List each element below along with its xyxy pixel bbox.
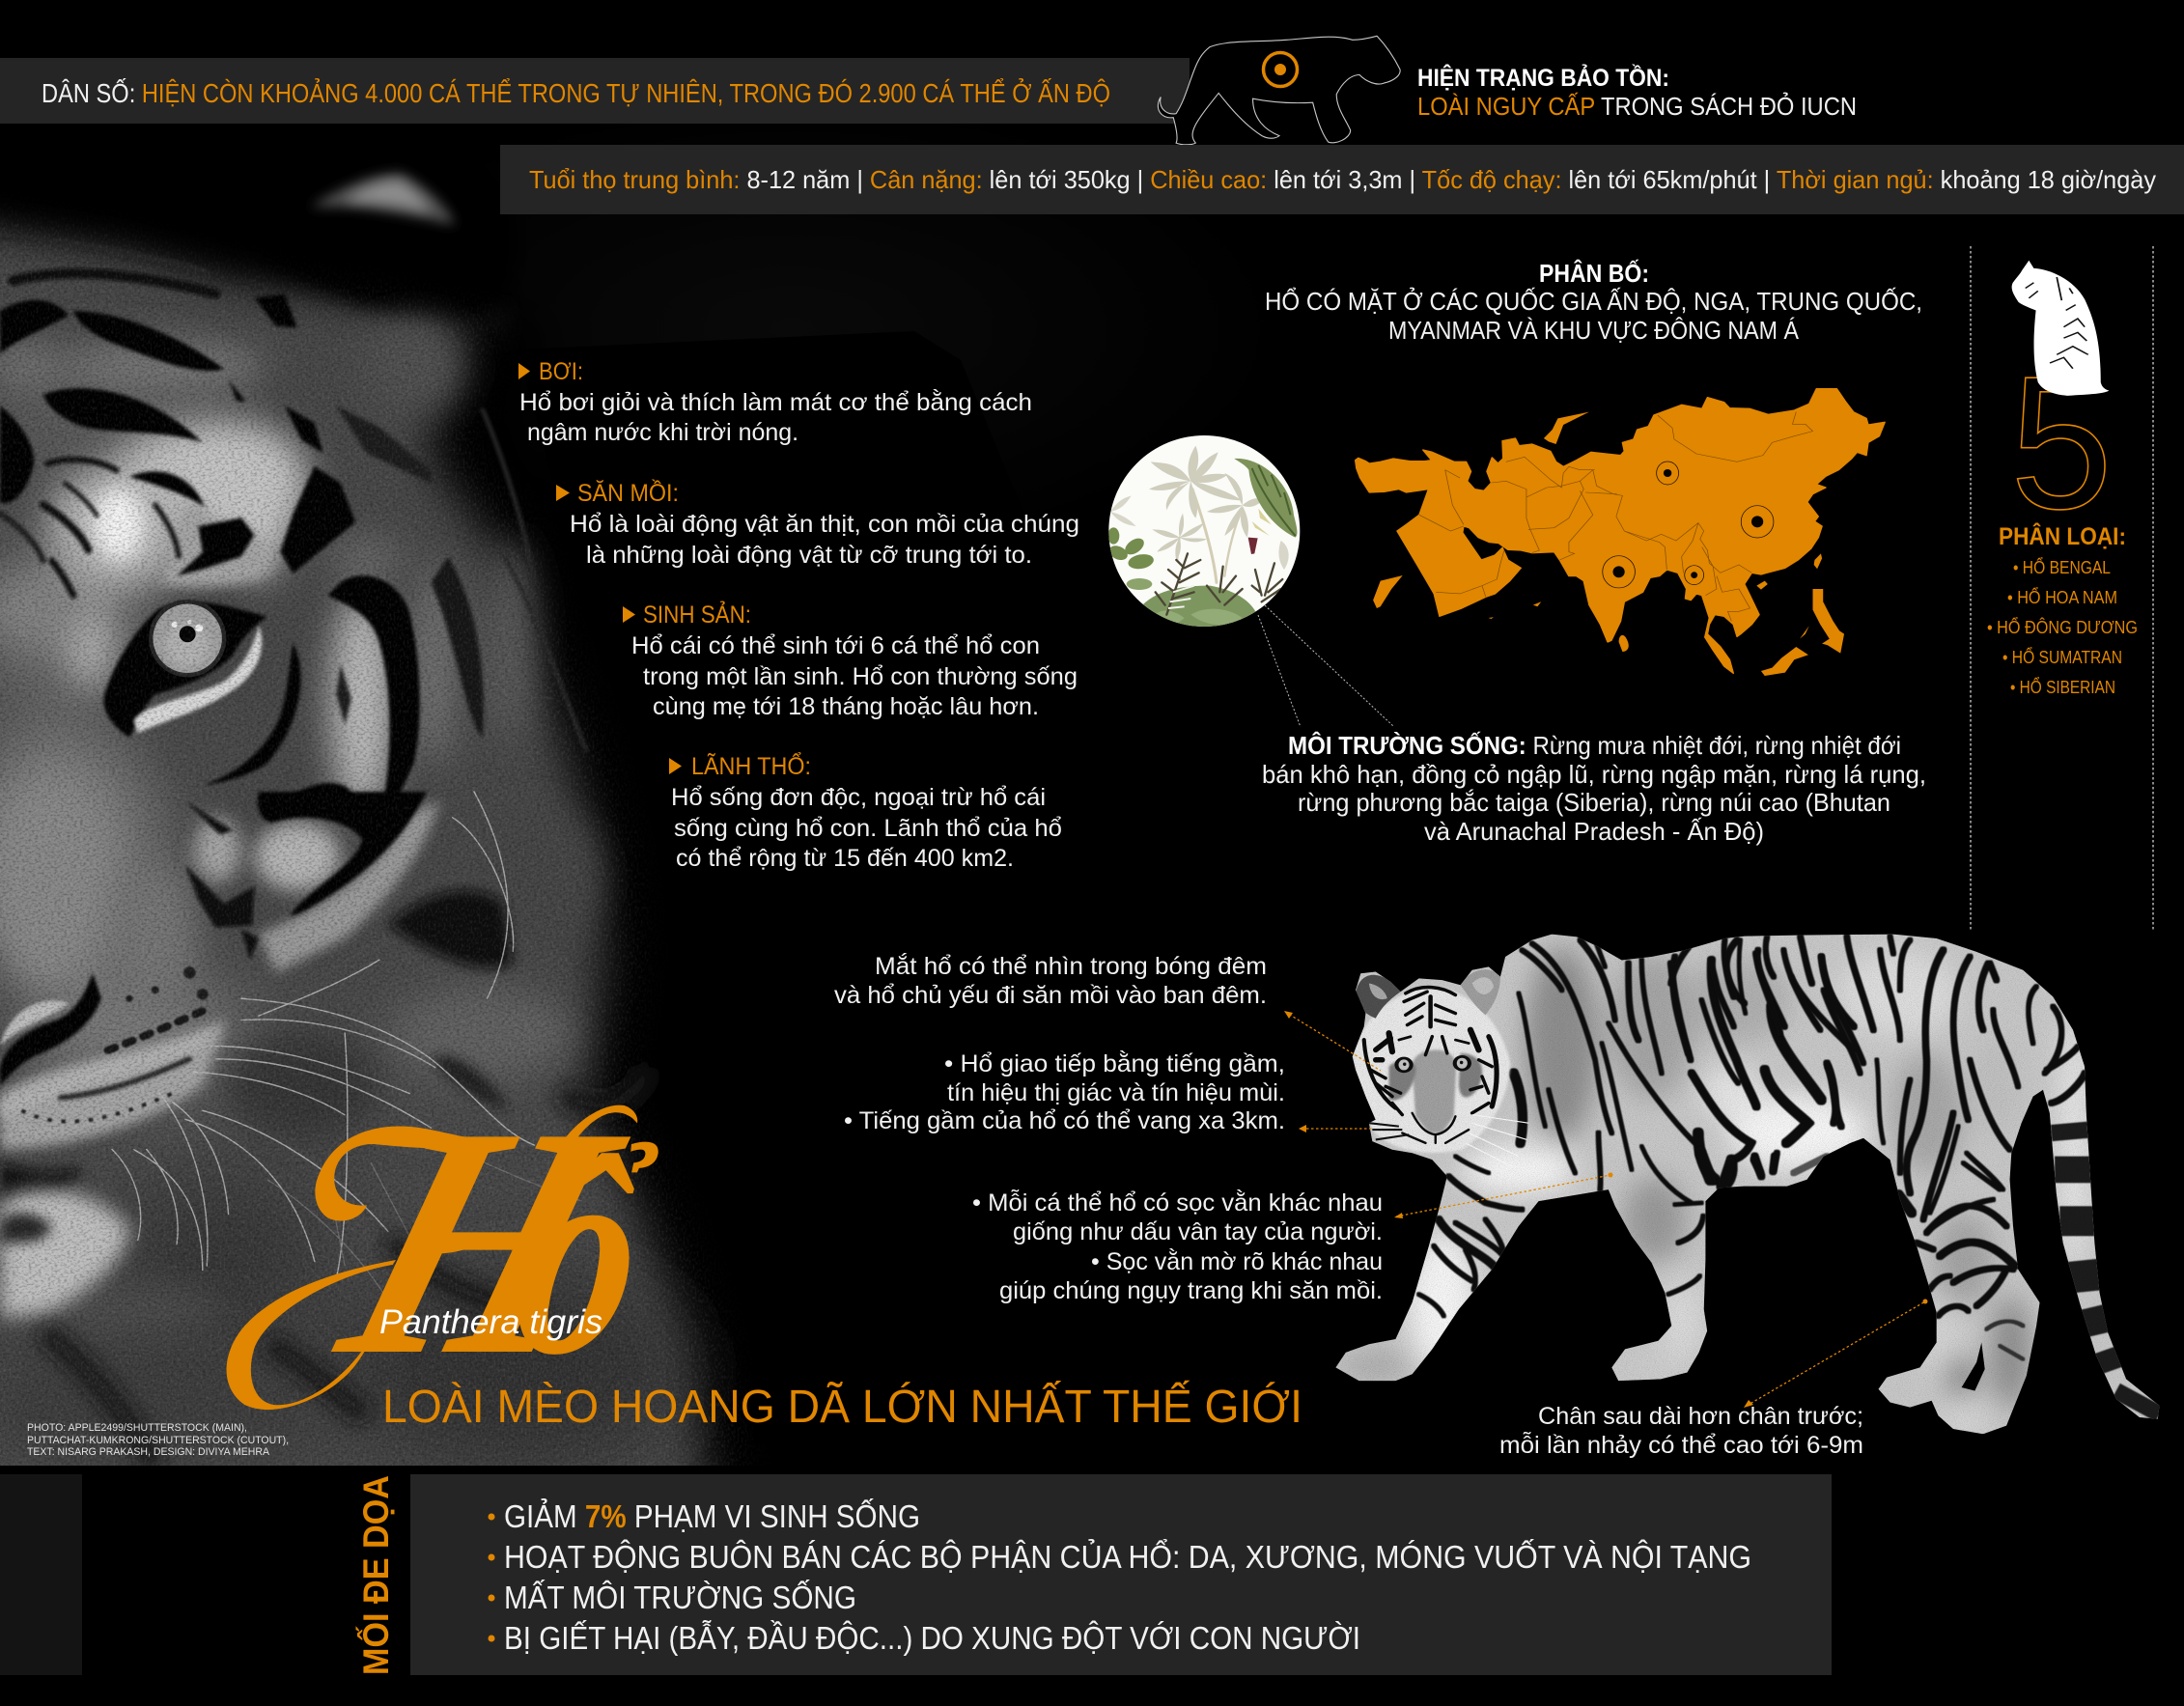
face light and shadow zones <box>0 377 686 1468</box>
mouth <box>0 1162 82 1207</box>
subspecies list: • HỔ HOA NAM <box>2007 587 2117 607</box>
photo credits: PHOTO: APPLE2499/SHUTTERSTOCK (MAIN), <box>27 1422 247 1434</box>
subspecies list: • HỔ SUMATRAN <box>2002 647 2122 667</box>
trunks <box>1177 489 1243 582</box>
annotation: hind legs: Chân sau dài hơn chân trước; <box>1538 1403 1863 1430</box>
annotation: stripes <box>972 1189 1383 1304</box>
country borders <box>1419 412 1813 621</box>
mainland <box>1356 389 1885 673</box>
icon: white tiger seated <box>2012 261 2109 396</box>
tiger stripes on icon <box>2026 277 2088 369</box>
conservation status text <box>1417 63 1857 121</box>
marker dots <box>1612 469 1763 578</box>
conservation status text: LOÀI NGUY CẤP TRONG SÁCH ĐỎ IUCN <box>1417 91 1857 121</box>
islands <box>1373 412 1844 676</box>
decorative swashes <box>227 1105 637 1410</box>
arrow heads <box>1284 1011 1927 1408</box>
distribution text: MYANMAR VÀ KHU VỰC ĐÔNG NAM Á <box>1388 316 1800 345</box>
ear <box>312 166 458 321</box>
distribution text: PHÂN BỐ: <box>1539 259 1649 288</box>
fur grain <box>1332 927 2170 1445</box>
banana leaf <box>1234 459 1297 538</box>
gap between hind legs <box>1962 1342 1985 1390</box>
tail bands <box>2052 1130 2160 1414</box>
dim head top <box>0 198 504 309</box>
fact: swimming: ngâm nước khi trời nóng. <box>527 419 798 446</box>
annotation: stripes: • Sọc vằn mờ rõ khác nhau <box>1091 1247 1383 1275</box>
fact: reproduction: Hổ cái có thể sinh tới 6 cá thể hổ con <box>631 632 1040 659</box>
fact: reproduction: SINH SẢN: <box>643 600 751 629</box>
top bar: population: DÂN SỐ: HIỆN CÒN KHOẢNG 4.000 CÁ THỂ TRONG TỰ NHIÊN, TRONG ĐÓ 2.900 CÁ THỂ Ở ẤN ĐỘ <box>42 77 1110 108</box>
eye <box>103 600 267 738</box>
tiger range markers <box>1603 461 1774 588</box>
fact: territory <box>669 751 1062 872</box>
dark backing for annotation block <box>753 922 1101 1443</box>
number 5: 5 <box>2010 337 2113 548</box>
conservation status text: HIỆN TRẠNG BẢO TỒN: <box>1417 63 1669 92</box>
fact: swimming: Hổ bơi giỏi và thích làm mát cơ thể bằng cách <box>519 388 1032 416</box>
annotation: communication: • Tiếng gầm của hổ có thể vang xa 3km. <box>844 1107 1285 1134</box>
threats panel <box>410 1474 1832 1675</box>
annotation: night vision: Mắt hổ có thể nhìn trong bóng đêm <box>875 952 1267 980</box>
annotation: communication: tín hiệu thị giác và tín hiệu mùi. <box>947 1079 1285 1106</box>
annotation: communication: • Hổ giao tiếp bằng tiếng gầm, <box>944 1049 1285 1077</box>
eyes <box>1394 1057 1414 1073</box>
annotation: night vision: và hổ chủ yếu đi săn mồi vào ban đêm. <box>834 982 1267 1009</box>
pointer lines from jungle circle <box>1258 605 1394 727</box>
photo credits: TEXT: NISARG PRAKASH, DESIGN: DIVIYA MEHRA <box>27 1446 270 1458</box>
fact: reproduction: cùng mẹ tới 18 tháng hoặc lâu hơn. <box>653 693 1039 720</box>
faint background palms <box>1110 495 1289 570</box>
upper face: dark markings <box>0 238 586 801</box>
fact: territory: có thể rộng từ 15 đến 400 km2. <box>676 845 1014 872</box>
fur grain <box>0 124 869 1466</box>
background glow behind fur <box>290 97 1294 560</box>
fact: swimming: BƠI: <box>539 358 583 385</box>
scientific name: Panthera tigris <box>379 1303 602 1341</box>
palm tree fronds <box>1149 446 1263 560</box>
fact: hunting: là những loài động vật từ cỡ trung tới to. <box>586 542 1032 569</box>
muzzle <box>0 1021 226 1150</box>
photo: tiger face close-up <box>0 166 751 1466</box>
fact: hunting <box>556 478 1079 569</box>
text block: behaviour facts <box>518 358 1079 872</box>
annotation: night vision <box>834 952 1267 1009</box>
rear body stripes <box>1670 937 2085 1359</box>
upper face: light fur <box>0 320 535 815</box>
distribution text: HỔ CÓ MẶT Ở CÁC QUỐC GIA ẤN ĐỘ, NGA, TRUNG QUỐC, <box>1265 286 1922 316</box>
face stripes <box>1364 988 1497 1143</box>
fact: hunting: Hổ là loài động vật ăn thịt, con mồi của chúng <box>570 511 1079 538</box>
habitat text: và Arunachal Pradesh - Ấn Độ) <box>1424 817 1764 846</box>
annotation: stripes: giúp chúng ngụy trang khi săn mồi. <box>999 1277 1383 1304</box>
annotation: stripes: • Mỗi cá thể hổ có sọc vằn khác nhau <box>972 1189 1383 1217</box>
fact: reproduction <box>623 600 1078 720</box>
fact: territory: Hổ sống đơn độc, ngoại trừ hổ cái <box>671 784 1046 811</box>
nose <box>0 1000 69 1046</box>
head <box>1353 969 1528 1166</box>
annotation: communication <box>844 1049 1285 1134</box>
lower face: light zones <box>0 788 647 1468</box>
snout stripes and patches <box>259 800 439 972</box>
ferns <box>1156 553 1282 615</box>
whiskers <box>112 792 535 1278</box>
threats panel: GIẢM 7% PHẠM VI SINH SỐNG <box>504 1497 920 1534</box>
stats bar: Tuổi thọ trung bình: 8-12 năm | Cân nặng: lên tới 350kg | Chiều cao: lên tới 3,3m | Tốc độ chạy: lên tới 65km/phút | Thời gian ngủ: khoảng 18 giờ/ngày <box>529 165 2156 194</box>
bottom foliage <box>1142 586 1258 637</box>
icon: tiger outline with conservation target <box>1158 36 1400 145</box>
map: Asia with tiger range <box>1356 389 1885 676</box>
stats bar <box>500 145 2184 214</box>
fur base <box>0 208 753 1506</box>
whiskers <box>1466 1115 1528 1166</box>
dark fur streaks <box>43 1068 647 1468</box>
subspecies column dividers <box>1971 246 2153 932</box>
letter ổ: ổ <box>500 1094 668 1415</box>
subtitle: LOÀI MÈO HOANG DÃ LỚN NHẤT THẾ GIỚI <box>382 1381 1302 1433</box>
image: jungle circle <box>1101 425 1313 637</box>
title: Hổ script lettering <box>227 1060 668 1424</box>
bottom left strip <box>0 1474 82 1675</box>
annotation: hind legs: mỗi lần nhảy có thể cao tới 6-9m <box>1499 1431 1863 1459</box>
photo: walking tiger cut-out <box>1332 927 2170 1445</box>
fact: hunting: SĂN MỒI: <box>577 478 679 507</box>
photo credits <box>27 1422 289 1458</box>
ears <box>1357 975 1401 1019</box>
front body stripes <box>1419 940 1854 1316</box>
fact: reproduction: trong một lần sinh. Hổ con thường sống <box>643 663 1078 690</box>
fact: territory: sống cùng hổ con. Lãnh thổ của hổ <box>674 815 1062 842</box>
flower <box>1248 538 1258 554</box>
annotation: stripes: giống như dấu vân tay của người. <box>1013 1218 1383 1245</box>
top bar: population <box>0 58 1190 124</box>
body shading <box>1339 947 2087 1434</box>
distribution text <box>1265 259 1922 345</box>
subspecies list: • HỔ ĐÔNG DƯƠNG <box>1987 617 2138 637</box>
threats heading: MỐI ĐE DỌA <box>355 1475 396 1675</box>
subspecies list: PHÂN LOẠI: <box>1999 521 2126 550</box>
habitat text: MÔI TRƯỜNG SỐNG: Rừng mưa nhiệt đới, rừng nhiệt đới <box>1288 731 1901 760</box>
fact: territory: LÃNH THỔ: <box>691 751 811 780</box>
subspecies list: • HỔ SIBERIAN <box>2010 677 2115 697</box>
subspecies list: • HỔ BENGAL <box>2013 557 2111 577</box>
chin fur <box>0 1189 129 1318</box>
habitat text: rừng phương bắc taiga (Siberia), rừng núi cao (Bhutan <box>1298 788 1890 817</box>
threats panel: BỊ GIẾT HẠI (BẪY, ĐẦU ĐỘC...) DO XUNG ĐỘT VỚI CON NGƯỜI <box>504 1620 1360 1656</box>
threats panel: HOẠT ĐỘNG BUÔN BÁN CÁC BỘ PHẬN CỦA HỔ: DA, XƯƠNG, MÓNG VUỐT VÀ NỘI TẠNG <box>504 1538 1751 1575</box>
annotation: hind legs <box>1499 1403 1863 1459</box>
photo credits: PUTTACHAT-KUMKRONG/SHUTTERSTOCK (CUTOUT), <box>27 1435 289 1446</box>
arrow pointers <box>1285 1012 1925 1406</box>
dim fur edge <box>474 315 753 1506</box>
left foliage <box>1106 527 1155 590</box>
fact: swimming <box>518 358 1032 446</box>
letter H: H <box>307 1060 657 1424</box>
habitat text: bán khô hạn, đồng cỏ ngập lũ, rừng ngập mặn, rừng lá rụng, <box>1262 760 1926 789</box>
threats panel: MẤT MÔI TRƯỜNG SỐNG <box>504 1579 856 1615</box>
dark backing for text block <box>518 331 1091 927</box>
subspecies list <box>1987 521 2138 697</box>
habitat text <box>1262 731 1926 846</box>
